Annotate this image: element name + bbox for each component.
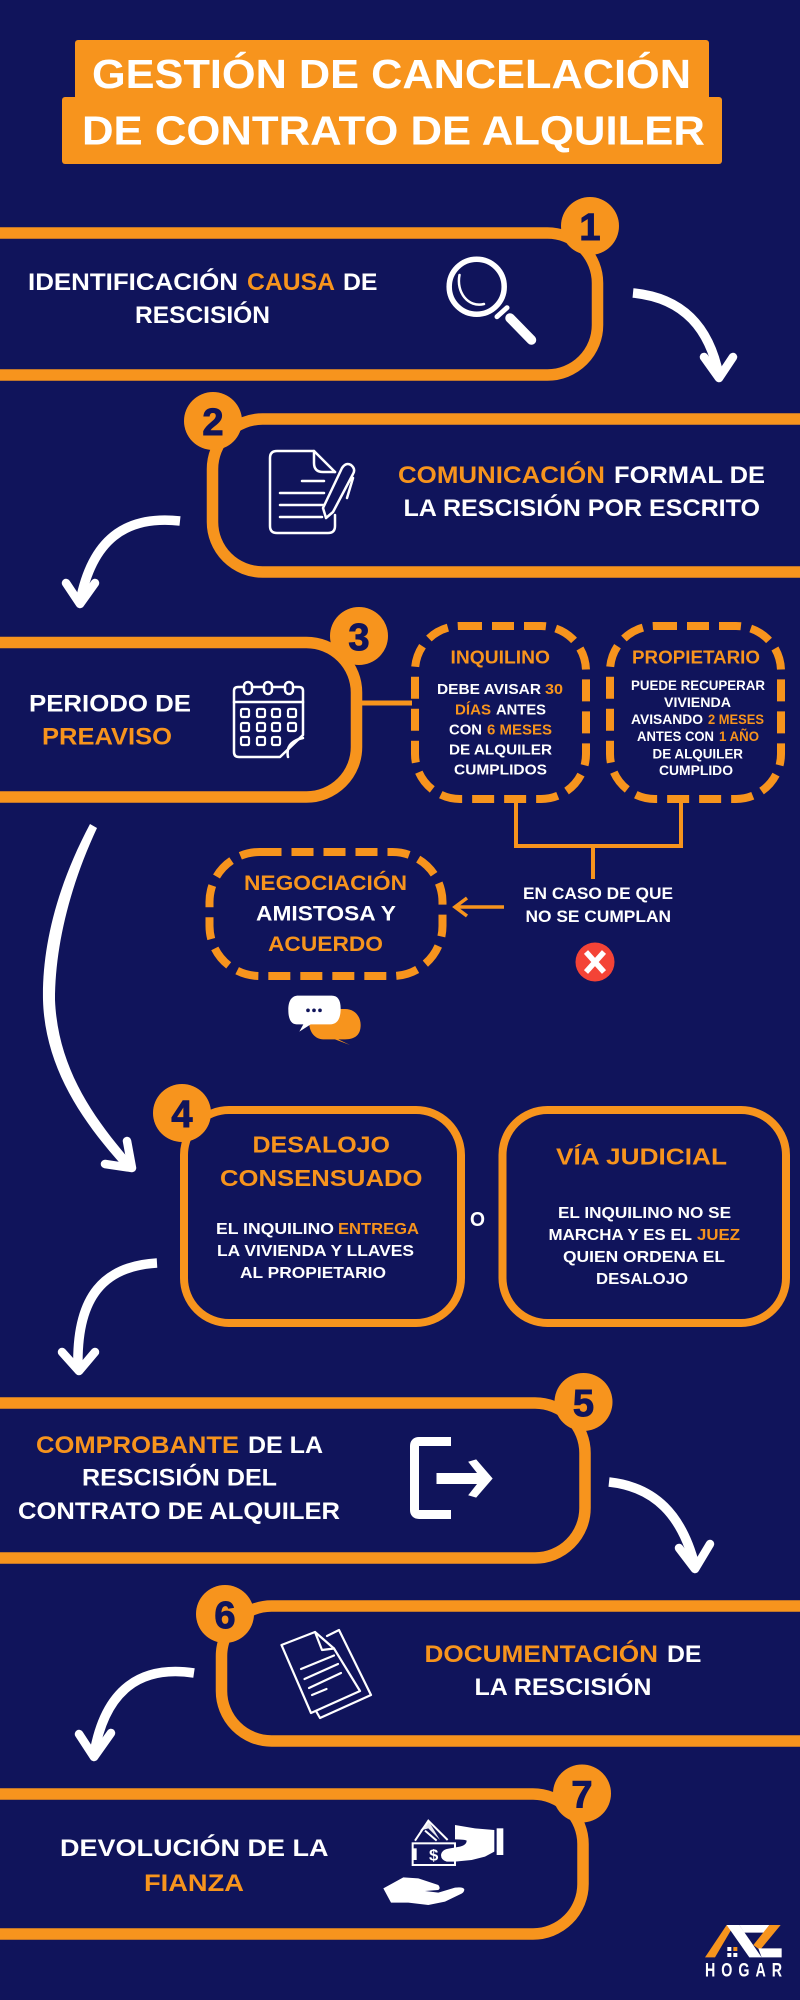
panel: step 3: PERIODO DE: [29, 690, 191, 718]
panel: vía judicial: [502, 1110, 786, 1323]
icon: hands and money: [383, 1821, 503, 1905]
panel: inquilino: INQUILINO: [450, 646, 550, 668]
panel: step 7: FIANZA: [144, 1870, 244, 1897]
panel: negociación: NEGOCIACIÓN: [244, 871, 407, 895]
panel: propietario: PUEDE RECUPERAR: [631, 678, 765, 693]
panel: desalojo consensuado: 4: [171, 1094, 193, 1136]
icon: speech bubbles: [288, 996, 361, 1045]
panel: inquilino: CUMPLIDOS: [454, 762, 547, 778]
panel: propietario: 2 MESES: [708, 712, 764, 727]
panel: vía judicial: EL INQUILINO NO SE: [558, 1205, 731, 1222]
panel: propietario: CUMPLIDO: [659, 763, 733, 778]
panel: step 2: LA RESCISIÓN POR ESCRITO: [404, 494, 760, 522]
panel: step 1: IDENTIFICACIÓN: [28, 268, 238, 296]
panel: step 1: RESCISIÓN: [135, 301, 270, 329]
text: o: O: [470, 1209, 485, 1231]
panel: step 6: [196, 1585, 800, 1741]
panel: vía judicial: DESALOJO: [596, 1271, 688, 1288]
panel: step 2: [184, 392, 800, 572]
panel: inquilino: ANTES: [496, 702, 546, 718]
panel: inquilino: [415, 626, 586, 799]
panel: desalojo consensuado: ENTREGA: [338, 1221, 419, 1238]
text: en caso de que no se cumplan: NO SE CUMPLAN: [526, 908, 671, 926]
panel: step 6: DOCUMENTACIÓN: [424, 1640, 658, 1668]
icon: documents: [282, 1630, 371, 1718]
panel: propietario: VIVIENDA: [664, 695, 731, 710]
text: en caso de que no se cumplan: EN CASO DE QUE: [523, 885, 673, 903]
panel: step 3: PREAVISO: [42, 724, 172, 750]
panel: step 2: 2: [202, 402, 224, 444]
panel: step 2: FORMAL DE: [614, 462, 765, 489]
arrow: to negociación: [455, 898, 504, 916]
icon: document and pen: [270, 451, 354, 533]
panel: negociación: ACUERDO: [268, 933, 383, 956]
panel: step 1: DE: [343, 269, 378, 296]
panel: propietario: 1 AÑO: [719, 729, 759, 744]
arrow: step 4 to 5: [62, 1263, 157, 1371]
panel: vía judicial: VÍA JUDICIAL: [556, 1142, 727, 1170]
panel: step 7: 7: [571, 1774, 593, 1816]
title: GESTIÓN DE CANCELACIÓN: [92, 51, 691, 97]
panel: vía judicial: QUIEN ORDENA EL: [563, 1249, 725, 1266]
panel: propietario: DE ALQUILER: [652, 746, 743, 762]
panel: desalojo consensuado: EL INQUILINO: [216, 1221, 334, 1238]
panel: step 5: CONTRATO DE ALQUILER: [18, 1498, 340, 1525]
panel: desalojo consensuado: CONSENSUADO: [220, 1165, 422, 1191]
arrow: step 6 to 7: [79, 1672, 194, 1757]
panel: negociación: AMISTOSA Y: [256, 902, 396, 926]
icon: red cross: [576, 942, 614, 982]
panel: desalojo consensuado: DESALOJO: [252, 1132, 390, 1158]
panel: propietario: PROPIETARIO: [632, 646, 760, 668]
panel: step 6: LA RESCISIÓN: [474, 1673, 652, 1701]
icon: calendar: [234, 682, 303, 757]
arrow: step 2 to 3: [66, 520, 180, 604]
panel: vía judicial: MARCHA Y ES EL: [548, 1227, 692, 1244]
panel: propietario: ANTES CON: [637, 729, 714, 744]
logo: AZ Hogar: HOGAR: [705, 1960, 782, 1981]
icon: exit door: [414, 1442, 492, 1514]
panel: inquilino: DEBE AVISAR: [437, 681, 541, 698]
panel: step 5: RESCISIÓN DEL: [82, 1464, 277, 1492]
panel: desalojo consensuado: [153, 1084, 461, 1323]
bracket connector: [516, 802, 681, 879]
panel: step 5: DE LA: [248, 1432, 323, 1459]
panel: inquilino: DÍAS: [455, 702, 491, 718]
text: en caso de que no se cumplan: [523, 885, 673, 926]
panel: negociación: [210, 852, 442, 976]
panel: propietario: [610, 626, 781, 799]
logo: AZ Hogar: [705, 1925, 782, 1981]
panel: step 6: DE: [667, 1641, 702, 1668]
panel: vía judicial: JUEZ: [697, 1227, 741, 1244]
panel: step 7: DEVOLUCIÓN DE LA: [60, 1834, 329, 1862]
panel: step 1: [0, 197, 619, 375]
arrow: step 1 to 2: [633, 293, 733, 378]
panel: step 5: 5: [573, 1383, 594, 1425]
panel: inquilino: DE ALQUILER: [449, 742, 552, 758]
title: DE CONTRATO DE ALQUILER: [82, 108, 705, 154]
icon: magnifying glass: [449, 259, 532, 340]
panel: step 3: 3: [348, 617, 370, 659]
panel: inquilino: 6 MESES: [487, 722, 552, 738]
panel: inquilino: 30: [545, 681, 563, 698]
arrow: step 5 to 6: [609, 1482, 710, 1569]
panel: step 3: [0, 607, 412, 797]
panel: propietario: AVISANDO: [631, 712, 703, 727]
arrow: long arrow to step 4: [43, 824, 135, 1171]
panel: desalojo consensuado: LA VIVIENDA Y LLAVES: [217, 1243, 414, 1260]
panel: step 7: [0, 1764, 611, 1934]
panel: step 1: CAUSA: [247, 269, 335, 296]
title: [62, 40, 722, 164]
panel: step 5: COMPROBANTE: [36, 1432, 239, 1459]
panel: step 6: 6: [214, 1595, 236, 1637]
icon: hands and money: $: [429, 1848, 439, 1865]
panel: step 5: [0, 1373, 612, 1558]
panel: step 1: 1: [579, 207, 601, 249]
panel: inquilino: CON: [449, 722, 482, 738]
panel: step 2: COMUNICACIÓN: [398, 461, 605, 489]
panel: desalojo consensuado: AL PROPIETARIO: [240, 1265, 386, 1282]
